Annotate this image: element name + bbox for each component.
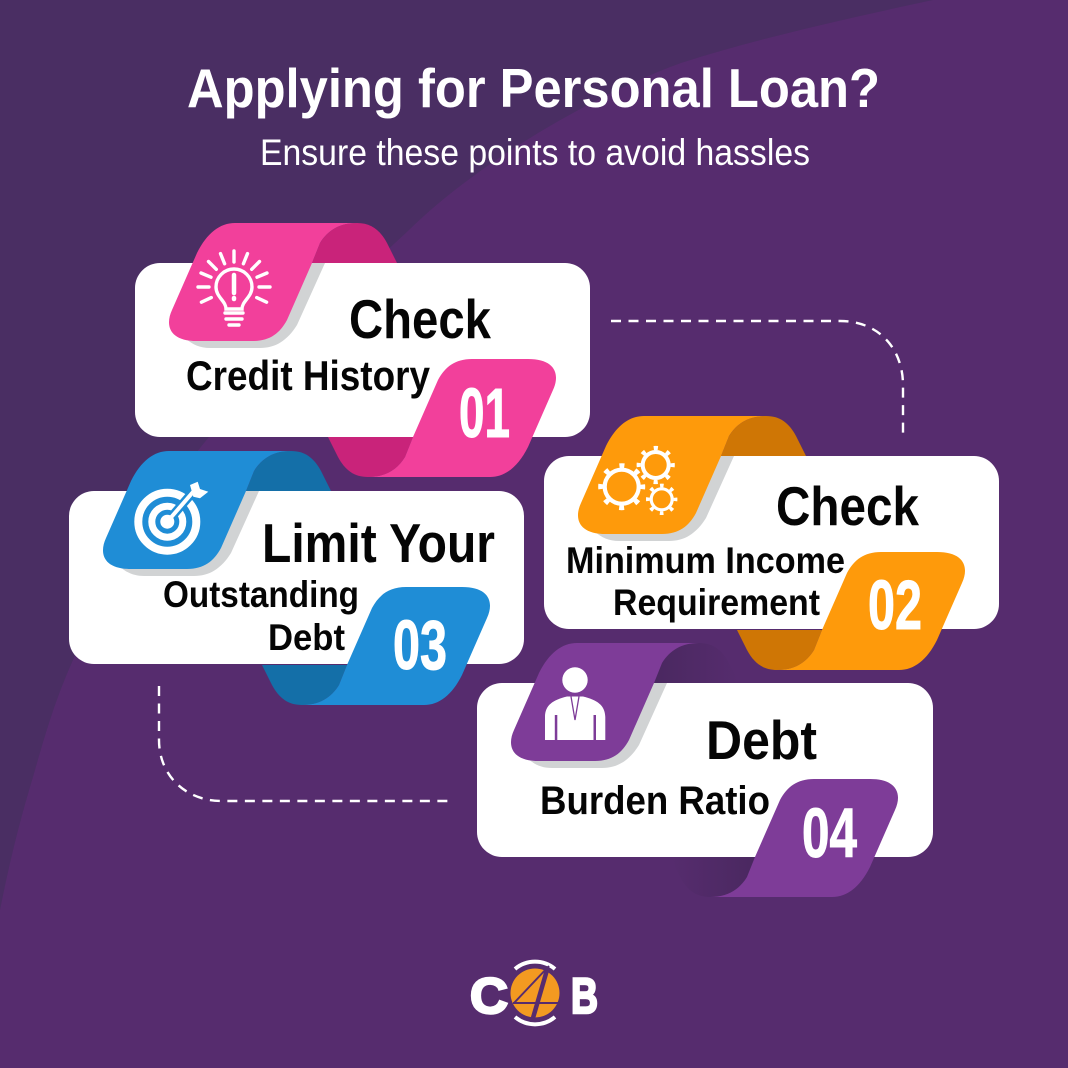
label: Outstanding [163, 574, 359, 615]
panel: step 2 minimum income requirement [544, 416, 999, 670]
icon: light bulb [198, 251, 270, 325]
panel: step 4 debt burden ratio [477, 643, 933, 897]
logo: C4B [470, 962, 598, 1024]
label: Requirement [613, 582, 820, 623]
panel: step 1 check credit history [135, 223, 590, 477]
heading: Check [349, 288, 491, 350]
title: Applying for Personal Loan? [187, 57, 880, 119]
logo: C4B: B [571, 968, 598, 1024]
label: Burden Ratio [540, 779, 770, 823]
panel: step 3 limit your outstanding debt [69, 451, 524, 705]
icon: person in suit [545, 667, 605, 740]
icon: gears [601, 448, 676, 513]
subtitle: Ensure these points to avoid hassles [260, 132, 810, 173]
number: 04 [802, 794, 857, 872]
label [566, 540, 845, 623]
dashed connector: step 1 to step 2 [611, 321, 903, 436]
dashed connector: step 3 to step 4 [159, 686, 452, 801]
label: Minimum Income [566, 540, 845, 581]
label: Debt [268, 617, 345, 658]
heading: Check [776, 475, 919, 537]
heading: Debt [706, 709, 817, 771]
heading: Limit Your [262, 512, 495, 574]
label: Credit History [186, 352, 431, 399]
number: 02 [868, 566, 922, 644]
logo: C4B: C [470, 968, 508, 1024]
number: 01 [459, 374, 510, 452]
number: 03 [393, 606, 447, 684]
icon: target with arrow [138, 482, 208, 551]
label [163, 574, 359, 658]
